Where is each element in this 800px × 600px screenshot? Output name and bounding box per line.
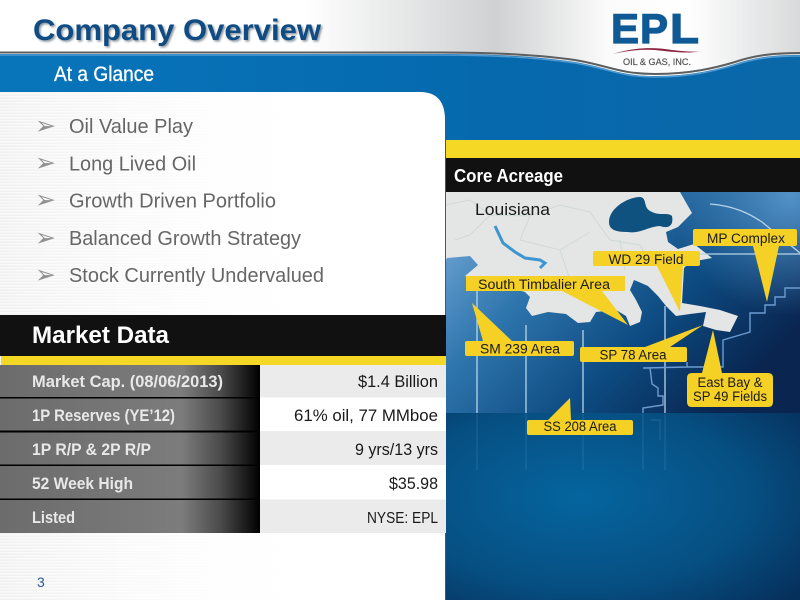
title: Company Overview xyxy=(34,16,323,48)
title: Company Overview xyxy=(33,14,321,47)
callout: East Bay & SP 49 Fields: SP 49 Fields xyxy=(693,389,767,404)
callout: MP Complex xyxy=(693,229,797,302)
row: R/P xyxy=(0,431,446,465)
row: listed: Listed xyxy=(32,509,75,527)
bullet 4 xyxy=(35,224,301,252)
bullet 2 xyxy=(35,149,196,177)
map: lease lines xyxy=(477,204,800,413)
bullet 2: Long Lived Oil xyxy=(69,154,196,176)
bullet 1 xyxy=(35,112,193,140)
page number: 3 xyxy=(37,574,45,590)
row: 52 week high xyxy=(0,465,446,500)
bullet 2: ➢ xyxy=(35,149,56,177)
bullet 4: ➢ xyxy=(35,224,56,252)
core acreage heading: Core Acreage xyxy=(454,166,563,186)
map: Louisiana label: Louisiana xyxy=(475,200,551,219)
map: blue boundary xyxy=(643,288,800,413)
map: sea background xyxy=(446,192,800,414)
map: parish boundaries xyxy=(446,200,650,280)
callout: MP Complex: MP Complex xyxy=(707,231,785,246)
market data heading: Market Data xyxy=(32,322,170,349)
map xyxy=(446,192,800,600)
map: Lake Pontchartrain xyxy=(609,197,672,232)
subtitle: At a Glance xyxy=(54,63,154,86)
market data table xyxy=(0,365,446,533)
row: reserves xyxy=(0,398,446,432)
map: reflected lines xyxy=(477,414,665,470)
header background xyxy=(0,0,800,80)
row: market cap xyxy=(0,365,446,398)
map: reflection xyxy=(446,413,800,600)
row: reserves: 1P Reserves (YE’12) xyxy=(32,407,175,425)
row: R/P: 9 yrs/13 yrs xyxy=(355,441,438,459)
callout: East Bay & SP 49 Fields xyxy=(687,330,773,407)
map: land xyxy=(446,192,738,332)
logo: EPL Oil & Gas: OIL & GAS, INC. xyxy=(623,57,691,68)
callout: East Bay & SP 49 Fields: East Bay & xyxy=(698,375,762,390)
bullet 3: ➢ xyxy=(35,186,56,214)
logo: EPL Oil & Gas xyxy=(611,5,701,68)
bullet list xyxy=(35,112,324,289)
row: R/P: 1P R/P & 2P R/P xyxy=(32,441,151,459)
callout: WD 29 Field xyxy=(593,251,700,312)
callout: SS 208 Area: SS 208 Area xyxy=(544,419,617,434)
header wave rule xyxy=(0,52,800,77)
row: 52 week high: 52 Week High xyxy=(32,475,133,493)
row: market cap: Market Cap. (08/06/2013) xyxy=(32,373,223,391)
row: 52 week high: $35.98 xyxy=(389,475,438,493)
market data heading xyxy=(0,315,446,365)
row: reserves: 61% oil, 77 MMboe xyxy=(294,407,438,425)
bullet 5 xyxy=(35,261,324,289)
row: listed xyxy=(0,500,446,533)
core acreage heading xyxy=(446,140,800,192)
logo: EPL Oil & Gas: EP xyxy=(611,5,668,52)
callout: SS 208 Area xyxy=(527,398,633,435)
callout: SP 78 Area xyxy=(580,325,703,362)
bullet 3 xyxy=(35,186,276,214)
bullet 3: Growth Driven Portfolio xyxy=(69,190,276,212)
map: river basin xyxy=(495,226,545,268)
callout: South Timbalier Area xyxy=(466,276,628,325)
callout: WD 29 Field: WD 29 Field xyxy=(608,252,684,267)
callout: SM 239 Area xyxy=(465,303,574,356)
bullet 1: Oil Value Play xyxy=(69,116,193,138)
row: market cap: $1.4 Billion xyxy=(358,373,438,391)
callouts xyxy=(465,229,797,435)
bullet 4: Balanced Growth Strategy xyxy=(69,228,301,250)
row: listed: NYSE: EPL xyxy=(367,510,438,527)
callout: SP 78 Area: SP 78 Area xyxy=(600,348,667,362)
callout: SM 239 Area: SM 239 Area xyxy=(480,342,561,356)
panel: at a glance xyxy=(0,92,445,600)
bullet 5: ➢ xyxy=(35,261,56,289)
bullet 5: Stock Currently Undervalued xyxy=(69,265,324,287)
callout: South Timbalier Area: South Timbalier Area xyxy=(478,277,611,292)
bullet 1: ➢ xyxy=(35,112,56,140)
logo: EPL Oil & Gas: L xyxy=(670,5,699,52)
